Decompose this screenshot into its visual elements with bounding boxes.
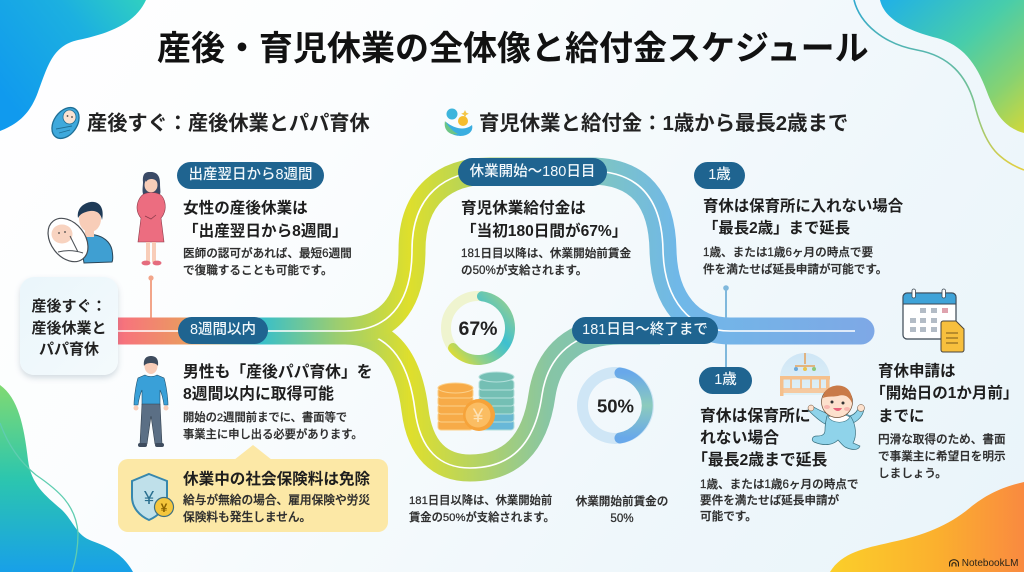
heading: application: 育休申請は bbox=[878, 362, 956, 380]
timeline: main and upper branch bbox=[118, 171, 861, 331]
callout text: insurance exemption: 休業中の社会保険料は免除 bbox=[183, 471, 370, 488]
note: 50% caption bbox=[576, 494, 668, 524]
note: women's leave bbox=[183, 246, 352, 276]
background blob: bottom right bbox=[830, 482, 1024, 572]
heading: women's leave: 女性の産後休業は bbox=[183, 200, 308, 216]
heading: extension lower: れない場合 bbox=[700, 430, 779, 446]
donut chart: 67%: 67% bbox=[458, 318, 498, 340]
pill: day 181 to end: 181日目〜終了まで bbox=[582, 322, 708, 338]
pill: 8 weeks from birth: 出産翌日から8週間 bbox=[188, 167, 313, 183]
pill: start to day 180 bbox=[458, 158, 607, 186]
heading: benefit 67% bbox=[461, 200, 627, 240]
icon: family sparkle bbox=[445, 108, 472, 136]
icon: yen shield bbox=[132, 474, 174, 520]
heading: paternity leave bbox=[183, 363, 373, 402]
heading: women's leave: 「出産翌日から8週間」 bbox=[183, 222, 348, 240]
pill: one year lower bbox=[699, 367, 752, 394]
note: 50% caption: 休業開始前賃金の bbox=[576, 494, 668, 508]
background blob: top left bbox=[0, 0, 146, 131]
note: benefit: の50%が支給されます。 bbox=[461, 264, 587, 276]
icon: coins and yen bbox=[438, 372, 514, 431]
note: benefit bbox=[461, 246, 631, 276]
section heading: postpartum: 産後すぐ：産後休業とパパ育休 bbox=[87, 113, 370, 135]
note: extension upper: 1歳、または1歳6ヶ月の時点で要 bbox=[703, 246, 873, 259]
vertical marker: one year bbox=[723, 285, 729, 368]
background blob: top right bbox=[880, 0, 1024, 133]
note: 50% caption: 50% bbox=[610, 512, 634, 524]
title: 産後・育児休業の全体像と給付金スケジュール bbox=[157, 30, 869, 68]
background blob: bottom left bbox=[0, 385, 133, 572]
note: extension upper: 件を満たせば延長申請が可能です。 bbox=[703, 262, 887, 276]
start box bbox=[20, 277, 118, 375]
start box: 産後すぐ： bbox=[31, 298, 106, 315]
note: women's leave: 医師の認可があれば、最短6週間 bbox=[183, 246, 352, 260]
note: extension upper bbox=[703, 246, 887, 276]
callout shape: insurance bbox=[118, 445, 388, 532]
note: extension lower: 要件を満たせば延長申請が bbox=[700, 494, 839, 506]
section heading: childcare leave: 育児休業と給付金：1歳から最長2歳まで bbox=[479, 113, 848, 135]
note: extension lower: 1歳、または1歳6ヶ月の時点で bbox=[700, 478, 858, 490]
pill: within 8 weeks bbox=[178, 317, 268, 344]
note: extension lower bbox=[700, 478, 858, 522]
pill: day 181 to end bbox=[572, 317, 718, 344]
start box: 産後休業と bbox=[31, 320, 106, 336]
heading: extension lower: 「最長2歳まで延長 bbox=[692, 452, 827, 468]
note: application bbox=[878, 432, 1006, 480]
donut chart: 50% bbox=[582, 372, 648, 438]
heading: application: 「開始日の1か月前」 bbox=[870, 385, 1018, 402]
pill: one year upper: 1歳 bbox=[708, 167, 731, 183]
note: extension lower: 可能です。 bbox=[700, 510, 757, 522]
decorative contour line: bottom left bbox=[0, 423, 78, 572]
callout text: insurance exemption: 保険料も発生しません。 bbox=[183, 510, 311, 524]
heading: women's leave bbox=[183, 200, 348, 240]
start box: パパ育休 bbox=[39, 341, 99, 358]
icon: woman bbox=[137, 172, 165, 265]
pill: one year upper bbox=[694, 162, 745, 189]
heading: benefit 67%: 「当初180日間が67%」 bbox=[461, 222, 627, 240]
pill: within 8 weeks: 8週間以内 bbox=[190, 322, 256, 338]
heading: extension upper: 「最長2歳」まで延長 bbox=[703, 220, 850, 237]
icon: father holding baby bbox=[40, 202, 113, 269]
icon: calendar bbox=[903, 289, 964, 352]
note: paternity leave bbox=[183, 411, 363, 440]
heading: paternity leave: 8週間以内に取得可能 bbox=[183, 386, 334, 402]
heading: benefit 67%: 育児休業給付金は bbox=[461, 200, 586, 216]
heading: paternity leave: 男性も「産後パパ育休」を bbox=[183, 364, 373, 380]
icon: baby with crib and mobile bbox=[780, 353, 865, 450]
heading: extension lower bbox=[692, 407, 827, 468]
note: application: 円滑な取得のため、書面 bbox=[878, 432, 1006, 446]
icon: coins and yen: ¥ bbox=[472, 406, 484, 427]
note: application: しましょう。 bbox=[878, 466, 947, 480]
note: after day 181 bbox=[409, 494, 555, 524]
icon: yen shield: ¥ bbox=[143, 488, 155, 508]
heading: extension lower: 育休は保育所に bbox=[700, 408, 811, 424]
callout text: insurance exemption bbox=[183, 470, 370, 524]
icon: yen shield: ¥ bbox=[161, 501, 168, 515]
vertical marker: mother bbox=[148, 275, 154, 318]
heading: extension upper: 育休は保育所に入れない場合 bbox=[703, 198, 903, 215]
heading: application: までに bbox=[878, 408, 925, 424]
callout text: insurance exemption: 給与が無給の場合、雇用保険や労災 bbox=[183, 494, 370, 506]
pill: one year lower: 1歳 bbox=[714, 372, 737, 388]
pill: start to day 180: 休業開始〜180日目 bbox=[470, 164, 595, 180]
heading: extension upper bbox=[703, 198, 903, 237]
donut chart: 67% bbox=[446, 296, 510, 360]
heading: application bbox=[870, 362, 1018, 424]
note: application: で事業主に希望日を明示 bbox=[878, 450, 1006, 462]
pill: 8 weeks from birth bbox=[177, 162, 324, 189]
icon: man bbox=[134, 356, 168, 447]
icon: swaddled baby bbox=[46, 102, 85, 144]
donut chart: 50%: 50% bbox=[597, 396, 634, 416]
decorative contour line: top right bbox=[854, 0, 1024, 170]
note: after day 181: 賃金の50%が支給されます。 bbox=[409, 512, 555, 524]
note: paternity leave: 開始の2週間前までに、書面等で bbox=[183, 412, 347, 424]
timeline: lower branch bbox=[345, 331, 660, 468]
note: after day 181: 181日目以降は、休業開始前 bbox=[409, 494, 552, 506]
note: paternity leave: 事業主に申し出る必要があります。 bbox=[183, 428, 363, 440]
note: women's leave: で復職することも可能です。 bbox=[183, 264, 333, 276]
note: benefit: 181日目以降は、休業開始前賃金 bbox=[461, 246, 631, 260]
logo: NotebookLM: NotebookLM bbox=[962, 558, 1018, 569]
